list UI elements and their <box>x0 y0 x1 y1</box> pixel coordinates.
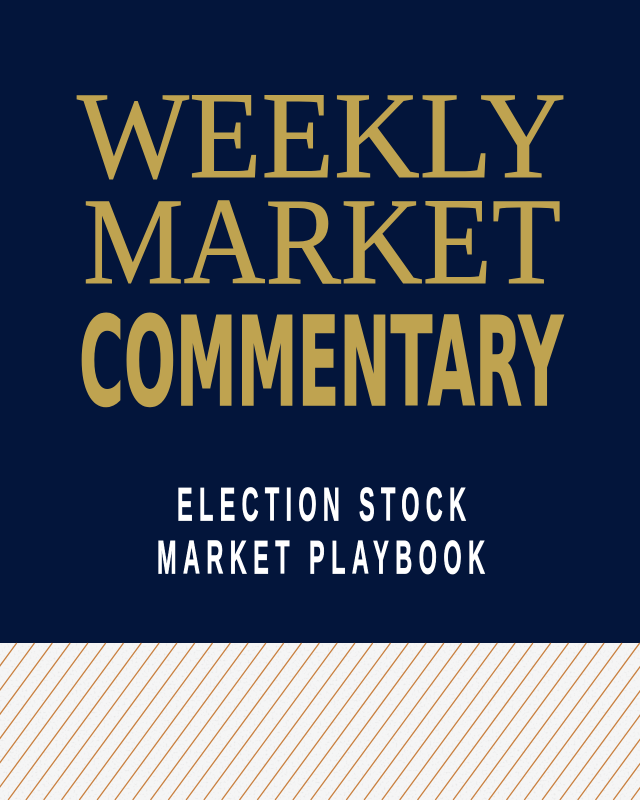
panel: striped footer <box>0 643 640 800</box>
subtitle line 1: ELECTION STOCK <box>177 477 466 531</box>
diagonal stripes <box>0 643 640 800</box>
title: weekly market commentary <box>77 67 566 435</box>
subtitle line 2: MARKET PLAYBOOK <box>157 530 485 584</box>
heading line: weekly: WEEKLY <box>77 67 566 204</box>
heading line: market: MARKET <box>83 173 561 310</box>
subtitle: election stock market playbook <box>157 477 485 584</box>
